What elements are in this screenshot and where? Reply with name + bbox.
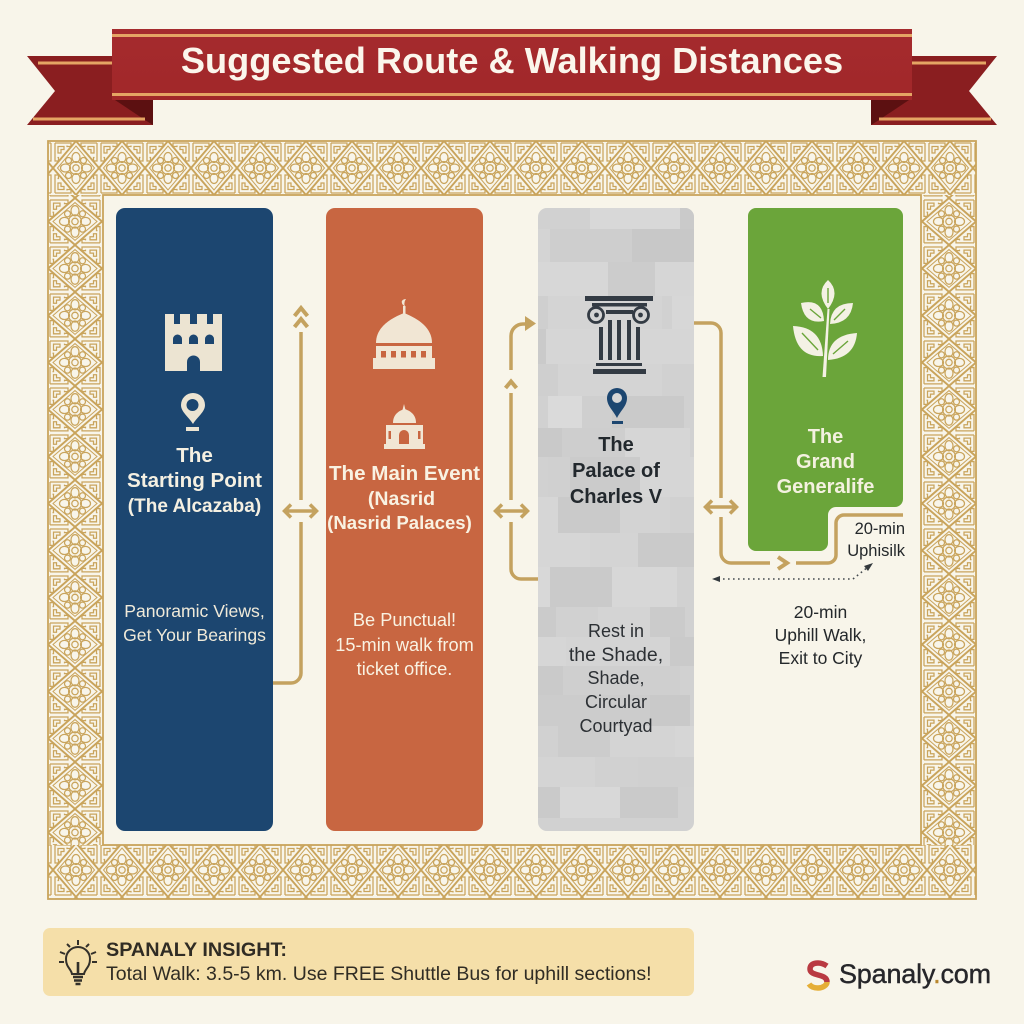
text: 20-min Uphisilk: Uphisilk xyxy=(847,542,905,560)
heading: The Grand Generalife: Generalife xyxy=(777,476,874,498)
icon: location pin, Palace xyxy=(607,388,627,424)
text: Rest in the Shade xyxy=(569,621,663,736)
text: Be Punctual xyxy=(335,610,474,679)
brand name: Spanaly.com xyxy=(839,959,991,989)
text: 20-min Uphill Walk: 20-min xyxy=(794,602,847,622)
text: Panoramic Views: Panoramic Views, xyxy=(124,601,265,621)
heading: The Main Event: (Nasrid Palaces) xyxy=(327,512,472,533)
text: 20-min Uphill Walk xyxy=(775,602,866,668)
text: Panoramic Views: Get Your Bearings xyxy=(123,625,266,645)
arrow: Nasrid to Palace xyxy=(496,316,538,579)
icon: light bulb xyxy=(59,940,97,986)
heading: The Grand Generalife xyxy=(777,426,874,498)
icon: location pin, Alcazaba xyxy=(181,393,205,431)
callout heading: SPANALY INSIGHT: xyxy=(106,939,287,961)
text: Rest in the Shade: the Shade, xyxy=(569,644,663,666)
text: Be Punctual: ticket office. xyxy=(357,659,452,679)
text: Be Punctual: Be Punctual! xyxy=(353,610,456,630)
icon: Spanaly logo mark xyxy=(806,960,830,991)
heading: The Palace of Charles V: The xyxy=(598,434,634,456)
dotted return arrow xyxy=(712,563,873,582)
ornamental border frame xyxy=(48,141,976,899)
heading: The Main Event: The Main Event xyxy=(329,462,480,485)
heading: The Starting Point xyxy=(127,444,262,517)
panel: Palace stone background xyxy=(538,208,694,831)
heading: The Starting Point: Starting Point xyxy=(127,469,262,492)
text: Rest in the Shade: Shade, xyxy=(587,668,645,688)
heading: The Main Event xyxy=(327,462,480,533)
text: 20-min Uphisilk: 20-min xyxy=(855,520,905,538)
arrow: Palace to Generalife xyxy=(694,323,903,569)
heading: The Palace of Charles V: Charles V xyxy=(570,486,662,508)
panel: Generalife background xyxy=(748,208,903,551)
heading: The Main Event: (Nasrid xyxy=(368,488,435,510)
icon: castle xyxy=(165,314,222,371)
icon: small mosque xyxy=(384,404,425,449)
icon: large mosque dome xyxy=(373,299,435,369)
heading: The Palace of Charles V xyxy=(570,434,662,508)
text: Suggested Route & Walking Distances xyxy=(181,40,843,81)
callout: Spanaly insight xyxy=(43,928,694,996)
icon: ionic column xyxy=(585,296,653,374)
arrow: Alcazaba to Nasrid xyxy=(273,308,316,683)
title ribbon xyxy=(27,29,997,125)
text: Be Punctual: 15-min walk from xyxy=(335,634,474,654)
text: Rest in the Shade: Courtyad xyxy=(579,716,653,736)
text: 20-min Uphill Walk: Exit to City xyxy=(779,648,862,668)
heading: The Grand Generalife: Grand xyxy=(796,451,855,473)
callout text: Total Walk: 3.5-5 km. Use FREE Shuttle Bus for uphill sections! xyxy=(106,963,652,985)
heading: The Palace of Charles V: Palace of xyxy=(572,460,660,482)
heading: The Starting Point: (The Alcazaba) xyxy=(128,496,261,517)
heading: The Starting Point: The xyxy=(176,444,213,467)
text: Panoramic Views xyxy=(123,601,266,645)
text: Rest in the Shade: Rest in xyxy=(588,621,644,641)
heading: The Grand Generalife: The xyxy=(808,426,843,448)
icon: leaf sprig xyxy=(793,280,857,377)
text: 20-min Uphill Walk: Uphill Walk, xyxy=(775,625,866,645)
text: Rest in the Shade: Circular xyxy=(585,692,647,712)
panel: Alcazaba background xyxy=(116,208,273,831)
panel: Nasrid background xyxy=(326,208,483,831)
text: 20-min Uphisilk xyxy=(847,520,905,560)
